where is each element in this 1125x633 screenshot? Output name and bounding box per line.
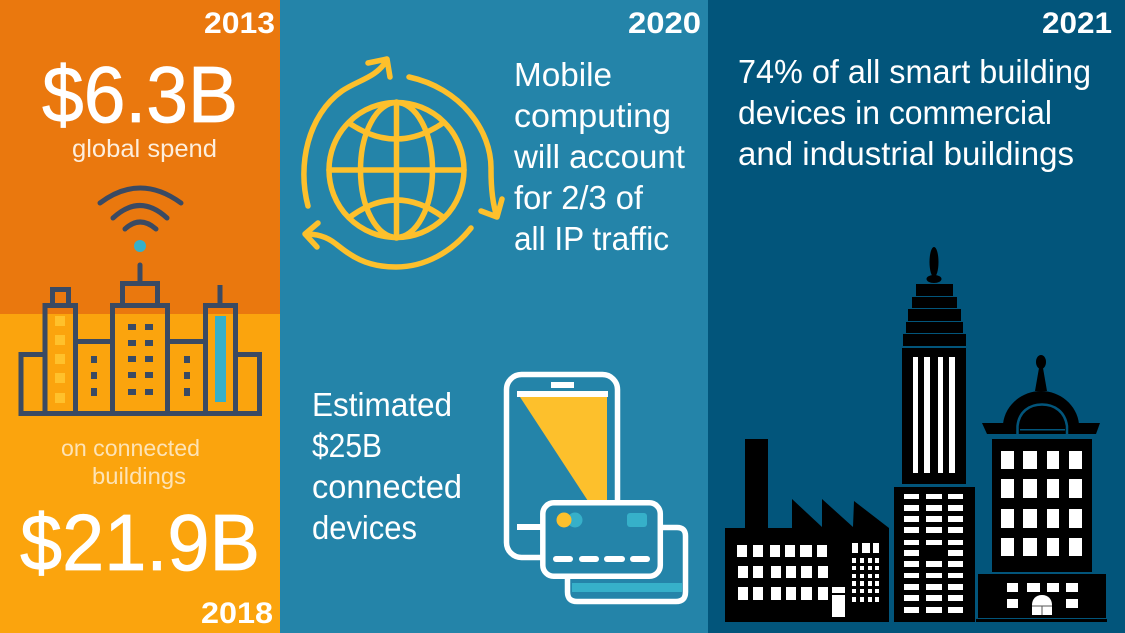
icon: phone: [506, 374, 618, 558]
text: 74 percent of smart building devices: 74% of all smart building: [738, 53, 1091, 90]
text: mobile computing share of IP traffic: [513, 56, 685, 257]
icon: domed building silhouette: [976, 355, 1107, 622]
icon: skyscraper silhouette: [894, 247, 975, 622]
text: mobile computing share of IP traffic: all IP traffic: [514, 220, 669, 257]
year 2013: 2013: [204, 7, 275, 40]
icon: front card: [543, 503, 660, 576]
panel background: orange: [0, 0, 280, 314]
panel background: navy: [708, 0, 1125, 633]
panel background: amber: [0, 314, 280, 633]
icon: phone and payment cards: [506, 374, 686, 602]
icon: building outlines: [21, 265, 260, 414]
icon: factory silhouette: [725, 439, 889, 622]
panel: 2013 to 2018 spend: [0, 0, 280, 633]
icon: connected city with wifi: [21, 188, 260, 414]
icon: wifi arcs: [100, 188, 181, 229]
text: estimated connected devices: Estimated: [312, 386, 452, 423]
panel: 2020 mobile and devices: [280, 0, 708, 633]
text: estimated connected devices: [312, 386, 462, 546]
icon: wifi dot: [134, 240, 146, 252]
icon: globe: [329, 102, 464, 238]
text: estimated connected devices: connected: [312, 468, 462, 505]
caption: on connected buildings: on connected: [61, 435, 200, 461]
year 2021: 2021: [1042, 7, 1112, 40]
panel background: teal: [280, 0, 708, 633]
caption: global spend: global spend: [72, 135, 217, 163]
caption: on connected buildings: [61, 435, 200, 489]
stat: $6.3B: $6.3B: [42, 50, 238, 139]
stat: $21.9B: $21.9B: [20, 498, 260, 587]
year 2018: 2018: [201, 597, 273, 630]
caption: on connected buildings: buildings: [92, 463, 186, 489]
arrow: bottom: [305, 223, 471, 267]
text: mobile computing share of IP traffic: Mobile: [514, 56, 612, 93]
text: mobile computing share of IP traffic: will account: [513, 138, 685, 175]
text: 74 percent of smart building devices: and industrial buildings: [738, 135, 1074, 172]
text: 74 percent of smart building devices: [738, 53, 1091, 172]
icon: globe with circular arrows: [304, 59, 502, 267]
text: estimated connected devices: $25B: [312, 427, 382, 464]
text: mobile computing share of IP traffic: computing: [514, 97, 671, 134]
icon: building windows: [55, 316, 226, 403]
text: 74 percent of smart building devices: devices in commercial: [738, 94, 1052, 131]
year 2020: 2020: [628, 7, 701, 40]
panel: 2021 smart building devices: [708, 0, 1125, 633]
arrow: top left: [304, 59, 390, 206]
text: mobile computing share of IP traffic: for 2/3 of: [514, 179, 644, 216]
text: estimated connected devices: devices: [312, 509, 417, 546]
icon: back card: [568, 528, 686, 602]
arrow: right: [409, 77, 502, 217]
